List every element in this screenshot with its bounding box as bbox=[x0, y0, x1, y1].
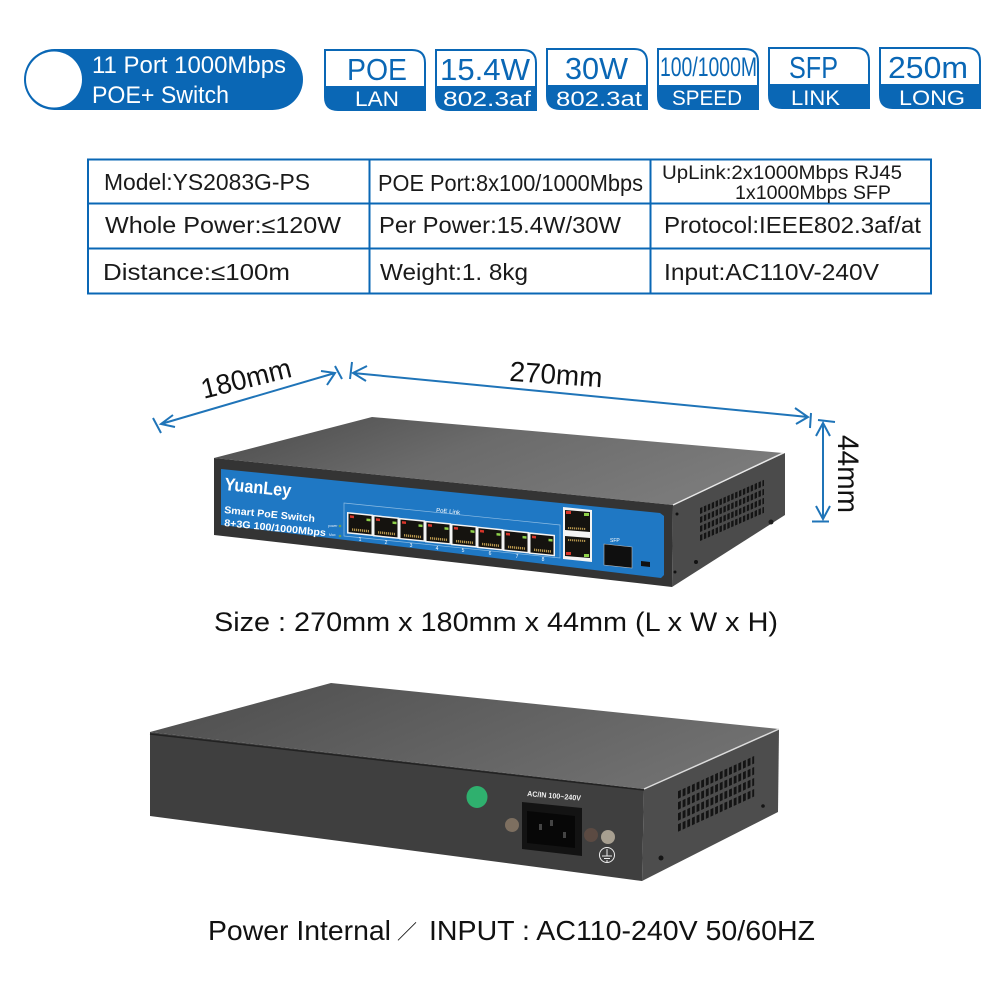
caption: power input bbox=[208, 915, 815, 946]
brand and model text: YuanLey bbox=[224, 474, 292, 501]
dimension arrow: 44mm: 44mm bbox=[831, 435, 864, 513]
port numbers: 4 bbox=[436, 546, 439, 552]
badge: 30W 802.3at: 30W bbox=[565, 51, 629, 86]
port numbers: 8 bbox=[542, 557, 545, 563]
status LEDs: Max bbox=[329, 533, 336, 537]
specification table: Protocol:IEEE802.3af/at bbox=[664, 212, 922, 238]
SFP slot bbox=[604, 538, 650, 568]
caption: power input: ／ bbox=[397, 922, 417, 944]
rear view of switch bbox=[150, 683, 779, 881]
switch side panel bbox=[672, 453, 785, 587]
brand and model text: Smart PoE Switch bbox=[224, 505, 315, 525]
specification table: 1x1000Mbps SFP bbox=[735, 183, 891, 204]
status LEDs bbox=[328, 524, 341, 537]
specification table: Distance:≤100m bbox=[103, 259, 290, 285]
uplink RJ45 ports bbox=[563, 507, 592, 562]
dimension arrow: 180mm bbox=[153, 352, 342, 433]
dimension arrow: 44mm bbox=[812, 420, 864, 522]
port numbers: 7 bbox=[516, 554, 519, 560]
screws bbox=[505, 818, 615, 844]
8 PoE RJ45 ports bbox=[347, 512, 555, 556]
badge: 15.4W 802.3af bbox=[435, 50, 537, 111]
port numbers: 3 bbox=[410, 543, 413, 549]
title pill: POE+ Switch bbox=[92, 82, 229, 109]
port numbers: 1 bbox=[359, 537, 362, 543]
badge: 250m LONG: 250m bbox=[888, 50, 968, 85]
front view of switch bbox=[214, 417, 785, 587]
SFP slot: SFP bbox=[610, 538, 620, 544]
specification table: POE Port:8x100/1000Mbps bbox=[378, 170, 643, 196]
PoE port frame bbox=[344, 503, 560, 558]
badge: POE LAN bbox=[324, 50, 426, 111]
ground symbol bbox=[600, 848, 614, 862]
badge: 15.4W 802.3af: 802.3af bbox=[443, 88, 531, 111]
badge: 30W 802.3at: 802.3at bbox=[556, 88, 642, 111]
badge: 100/1000M SPEED bbox=[657, 49, 759, 110]
specification table bbox=[88, 159, 931, 294]
switch top face bbox=[214, 417, 783, 505]
specification table: Input:AC110V-240V bbox=[664, 259, 880, 285]
AC input label: AC/IN 100~240V bbox=[527, 789, 581, 803]
rear top face bbox=[150, 683, 779, 789]
rear side panel bbox=[642, 729, 779, 881]
badge: SFP LINK: SFP bbox=[789, 50, 838, 85]
badge: 250m LONG bbox=[879, 48, 981, 110]
badge: SFP LINK bbox=[768, 48, 870, 110]
specification table: UpLink:2x1000Mbps RJ45 bbox=[662, 163, 902, 184]
dimension arrow: 270mm bbox=[350, 356, 811, 428]
port numbers bbox=[359, 537, 545, 563]
caption: power input: Power Internal bbox=[208, 915, 391, 946]
badge: 100/1000M SPEED: SPEED bbox=[672, 87, 742, 110]
title pill: 11 Port 1000Mbps bbox=[92, 52, 286, 79]
badge: 30W 802.3at bbox=[546, 49, 648, 111]
badge: SFP LINK: LINK bbox=[791, 87, 840, 110]
specification table: Model:YS2083G-PS bbox=[104, 169, 310, 195]
specification table: Whole Power:≤120W bbox=[105, 212, 341, 238]
specification table: Weight:1. 8kg bbox=[380, 259, 528, 285]
port numbers: 5 bbox=[462, 548, 465, 554]
caption: power input: INPUT : AC110-240V 50/60HZ bbox=[429, 915, 815, 946]
brand and model text bbox=[224, 474, 461, 539]
brand and model text: 8+3G 100/1000Mbps bbox=[224, 518, 327, 539]
AC power socket bbox=[522, 802, 582, 856]
dimension arrow: 270mm: 270mm bbox=[509, 356, 604, 393]
rear panel bbox=[150, 732, 644, 881]
switch front face bbox=[214, 458, 673, 587]
badge: 100/1000M SPEED: 100/1000M bbox=[660, 52, 757, 82]
status LEDs: power bbox=[328, 524, 338, 528]
badge: 250m LONG: LONG bbox=[899, 87, 965, 110]
QC pass sticker bbox=[466, 786, 488, 808]
badge: POE LAN: POE bbox=[347, 52, 407, 87]
port numbers: 6 bbox=[489, 551, 492, 557]
title pill bbox=[24, 49, 303, 110]
caption: size: Size : 270mm x 180mm x 44mm (L x W x H) bbox=[214, 607, 778, 637]
brand and model text: PoE Link bbox=[436, 508, 461, 516]
blue front panel bbox=[221, 469, 664, 578]
port numbers: 2 bbox=[385, 540, 388, 546]
specification table: Per Power:15.4W/30W bbox=[379, 212, 621, 238]
badge: 15.4W 802.3af: 15.4W bbox=[440, 52, 531, 87]
badge: POE LAN: LAN bbox=[355, 88, 399, 111]
dimension arrow: 180mm: 180mm bbox=[198, 352, 295, 405]
